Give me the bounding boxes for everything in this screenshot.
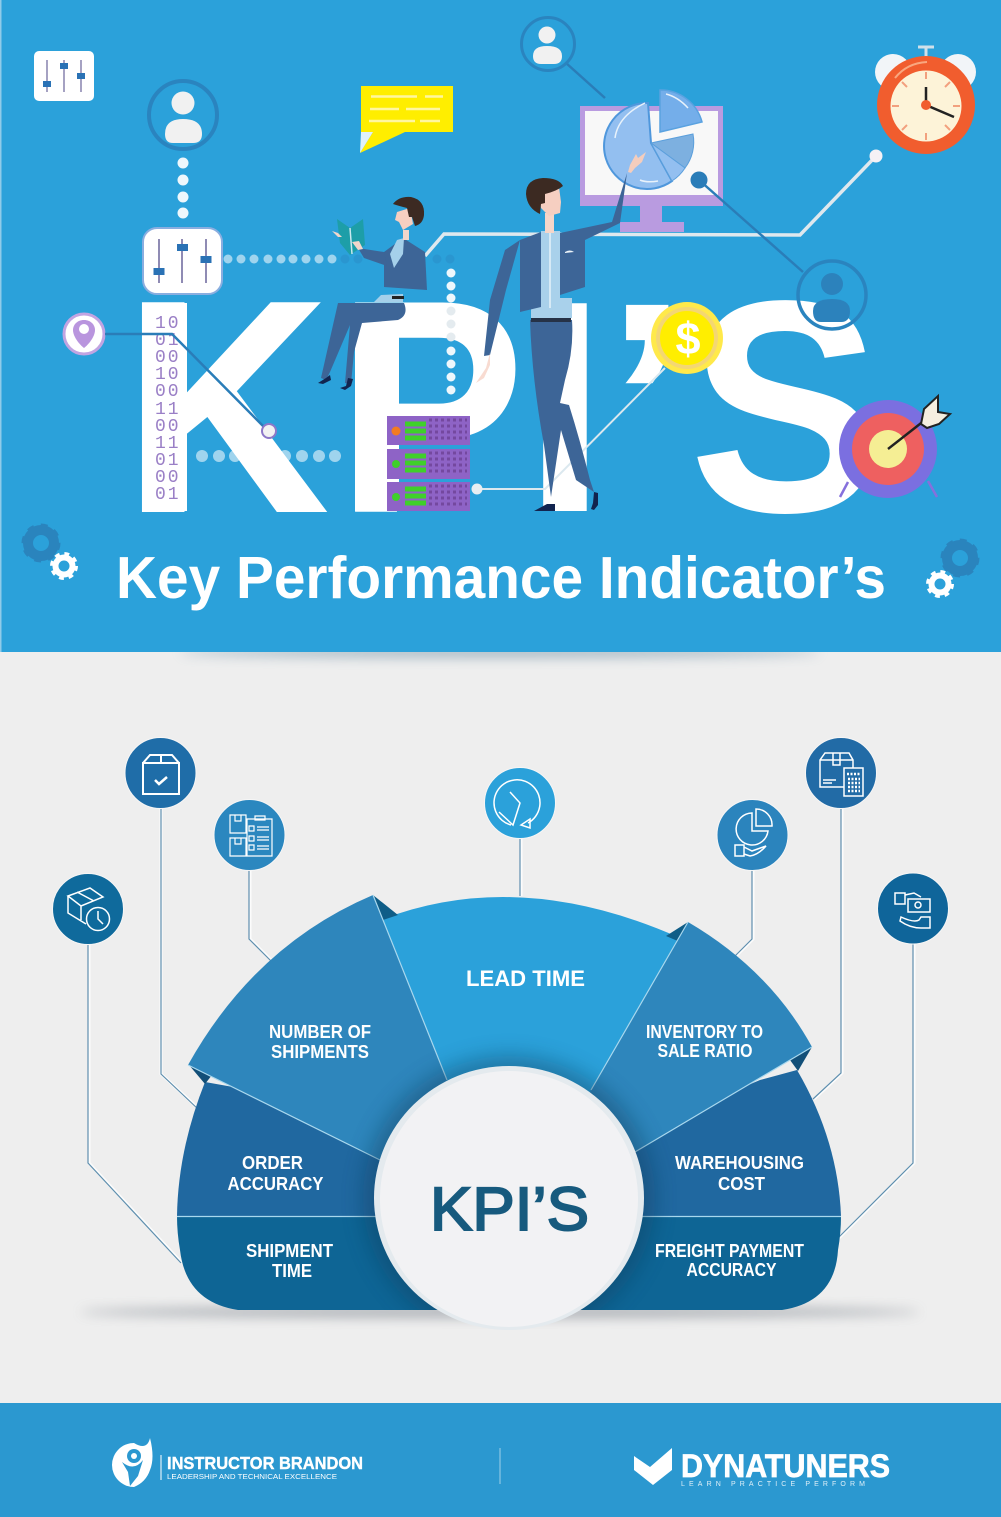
dotted connector horizontal: [224, 254, 336, 264]
illustration: monitor with pie chart: [580, 90, 723, 232]
icon: gears right: [928, 541, 977, 596]
connector: pin to K: [105, 334, 276, 438]
big heading letters KPI'S: S: [689, 238, 881, 575]
binary column: 10: [155, 365, 181, 385]
segment: number of shipments: [188, 895, 470, 1160]
label: shipment time: [246, 1241, 333, 1281]
label: warehousing cost: [675, 1153, 804, 1194]
binary column: 10: [155, 314, 181, 334]
segment dividers: [177, 895, 841, 1216]
binary column: 01: [155, 451, 181, 471]
icon: gears left: [24, 526, 76, 578]
segment labels: [228, 966, 804, 1281]
icon: map pin: [64, 314, 104, 354]
binary column: 00: [155, 468, 181, 488]
centre disc: [374, 1066, 644, 1330]
logo: Instructor Brandon: LEADERSHIP AND TECHNICAL EXCELLENCE: [167, 1472, 337, 1481]
connector lines: [88, 808, 913, 1263]
label: inventory to sale ratio: [646, 1022, 763, 1061]
dotted connector vertical: [178, 158, 188, 218]
panel: header: [0, 0, 1001, 652]
label: order accuracy: [228, 1153, 324, 1194]
icon: dollar coin: [651, 302, 723, 374]
icon: user lower right: [690, 172, 866, 329]
panel: footer: [0, 1403, 1001, 1517]
binary column: 00: [155, 348, 181, 368]
binary column: 00: [155, 417, 181, 437]
logo: Dynatuners: DYNATUNERS: [681, 1448, 890, 1484]
chart endpoint dot: [870, 150, 882, 162]
logo: Dynatuners: LEARN PRACTICE PERFORM: [681, 1481, 865, 1488]
dotted connector on K: [196, 450, 341, 462]
fold: right lower: [790, 1047, 812, 1071]
binary column: [155, 314, 181, 505]
binary column: 11: [155, 434, 181, 454]
dotted connector down into P: [446, 268, 456, 394]
graph line: [425, 156, 876, 256]
title: Key Performance Indicator’s: [116, 545, 886, 611]
binary column: 01: [155, 485, 181, 505]
label: number of shipments: SHIPMENTS: [271, 1042, 369, 1062]
big heading letters KPI'S: K: [124, 237, 328, 575]
big heading letters KPI'S: ’: [605, 245, 689, 555]
label: number of shipments: NUMBER OF: [269, 1022, 371, 1042]
segment: freight payment accuracy: [565, 1216, 841, 1310]
dotted connector faint continuation: [340, 254, 454, 264]
fold: left upper: [373, 895, 398, 920]
label: warehousing cost: WAREHOUSING: [675, 1153, 804, 1173]
icon: user top left: [149, 81, 217, 149]
label: freight payment accuracy: ACCURACY: [686, 1260, 776, 1280]
label: inventory to sale ratio: SALE RATIO: [658, 1041, 752, 1061]
segment: warehousing cost: [590, 1070, 841, 1216]
icon: warehousing cost: [806, 738, 876, 808]
label: shipment time: TIME: [272, 1261, 312, 1281]
segment: shipment time: [177, 1216, 455, 1310]
dotted connector across P: [446, 306, 456, 342]
panel shadow: [180, 647, 820, 657]
label: inventory to sale ratio: INVENTORY TO: [646, 1022, 763, 1042]
icon: dollar coin: $: [675, 313, 701, 364]
icon: server rack: [387, 416, 470, 511]
icon: target with arrow: [839, 396, 950, 498]
icon: shipment time: [52, 874, 124, 944]
label: number of shipments: [269, 1022, 371, 1062]
connector: server to coin: [472, 368, 665, 494]
fold: left lower: [189, 1065, 212, 1084]
speech bubble: [360, 86, 453, 153]
segment: lead time: [383, 897, 680, 1110]
icon: small slider panel: [34, 51, 94, 101]
connector lines: left: [89, 808, 914, 1263]
diagram: KPI dome: [177, 895, 841, 1310]
label: freight payment accuracy: [655, 1241, 804, 1280]
icon: lead time: [484, 768, 556, 838]
label: freight payment accuracy: FREIGHT PAYMENT: [655, 1241, 804, 1261]
binary column: 00: [155, 382, 181, 402]
fold: right upper: [666, 922, 688, 942]
label: order accuracy: ACCURACY: [228, 1174, 324, 1194]
segment: order accuracy: [177, 1082, 430, 1216]
icon: user connected to monitor: [522, 18, 605, 98]
icon: order accuracy: [125, 738, 196, 808]
illustration: standing man presenting: [476, 152, 646, 511]
icon: inventory to sale ratio: [717, 800, 788, 870]
label: shipment time: SHIPMENT: [246, 1241, 333, 1261]
logo: Instructor Brandon: [112, 1438, 363, 1487]
big heading letters KPI'S: I: [523, 238, 607, 575]
binary column: 01: [155, 331, 181, 351]
footer divider: [499, 1448, 501, 1484]
label: lead time: LEAD TIME: [466, 966, 585, 991]
icon: slider panel: [143, 228, 222, 294]
ground shadow: [80, 1307, 920, 1317]
big heading letters KPI'S: [124, 237, 881, 575]
icon: number of shipments: [214, 800, 285, 870]
binary column: 11: [155, 400, 181, 420]
big heading letters KPI'S: P: [337, 238, 524, 575]
centre label: KPI’S: [430, 1175, 589, 1243]
logo: Instructor Brandon: INSTRUCTOR BRANDON: [167, 1453, 363, 1473]
segment: inventory to sale ratio: [560, 922, 812, 1152]
label: warehousing cost: COST: [718, 1174, 765, 1194]
label: order accuracy: ORDER: [242, 1153, 303, 1173]
icon: freight payment accuracy: [878, 873, 948, 944]
illustration: seated man reading: [318, 197, 427, 390]
disc shadow: [363, 1056, 655, 1340]
icon: alarm clock: [875, 47, 976, 154]
